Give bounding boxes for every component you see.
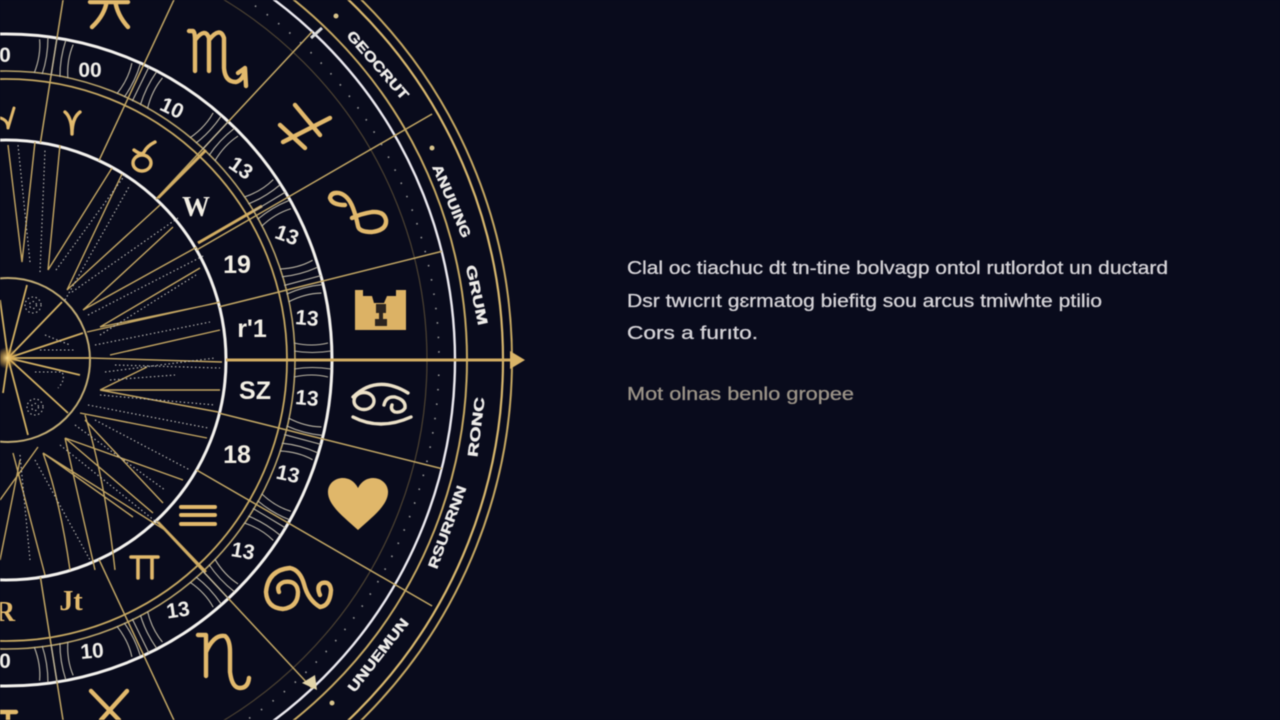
text block: description: Dsr twıcrıt gɛrmatog biefitg sou arcus tmiwhte ptilio (627, 291, 1102, 311)
icon: bottom-left serif sign (0, 712, 16, 720)
marker dots and small arrow (302, 14, 434, 706)
outer rim labels: RONC (464, 396, 488, 458)
arrow: main pointer (226, 351, 525, 369)
icon: swirl sign (266, 568, 331, 609)
middle ring glyphs: r'1 (237, 315, 267, 343)
text block: description (627, 258, 1168, 343)
middle ring glyphs: Jt (59, 586, 83, 617)
outer rim labels: GRUM (463, 264, 491, 326)
outer rim labels: RSURRNN (425, 483, 469, 571)
outer rim labels: UNUEMUN (344, 615, 412, 695)
outer rim labels (344, 27, 491, 695)
sign dividers (40, 0, 442, 720)
number ring labels: 13 (272, 221, 302, 250)
outer rim labels: ANUUING (429, 162, 475, 240)
number ring labels: 10 (79, 639, 105, 664)
icon: castle block (355, 290, 406, 330)
icon: top sign glyph (90, 0, 128, 27)
icon: cancer (353, 384, 411, 424)
middle ring glyphs (0, 108, 271, 628)
wheel rings (0, 0, 512, 720)
star centre (0, 347, 18, 369)
number ring labels: 10 (156, 93, 187, 124)
middle ring glyphs: W (182, 192, 210, 223)
number ring labels: 13 (274, 461, 302, 488)
middle ring glyphs: 18 (223, 441, 251, 469)
icon: bottom cross sign (91, 691, 127, 720)
text block: description: Cors a furıto. (627, 323, 758, 343)
icon: crossed sign (280, 105, 330, 148)
number ring labels: 13 (225, 152, 257, 185)
icon: capricorn (198, 635, 249, 688)
number ring labels: 13 (229, 538, 256, 565)
icon: scorpio (189, 31, 246, 86)
star burst lines (0, 142, 222, 575)
text block: secondary note: Mot olnas benlo gropee (627, 384, 854, 404)
number ring labels (0, 44, 320, 673)
icon: loop sign (330, 193, 386, 232)
middle ring glyphs: 19 (223, 251, 251, 279)
middle ring glyphs: SZ (239, 377, 271, 405)
dotted star lines (18, 145, 220, 560)
number ring labels: 13 (294, 386, 320, 411)
number ring labels: 00 (78, 59, 102, 82)
number ring labels: 13 (294, 306, 320, 331)
icon: heart (328, 478, 388, 530)
number ring labels: 13 (165, 597, 191, 624)
number ring ticks (34, 35, 332, 685)
text block: description: Clal oc tiachuc dt tn-tine bolvagp ontol rutlordot un ductard (627, 258, 1168, 278)
outer rim labels: GEOCRUT (344, 27, 413, 103)
